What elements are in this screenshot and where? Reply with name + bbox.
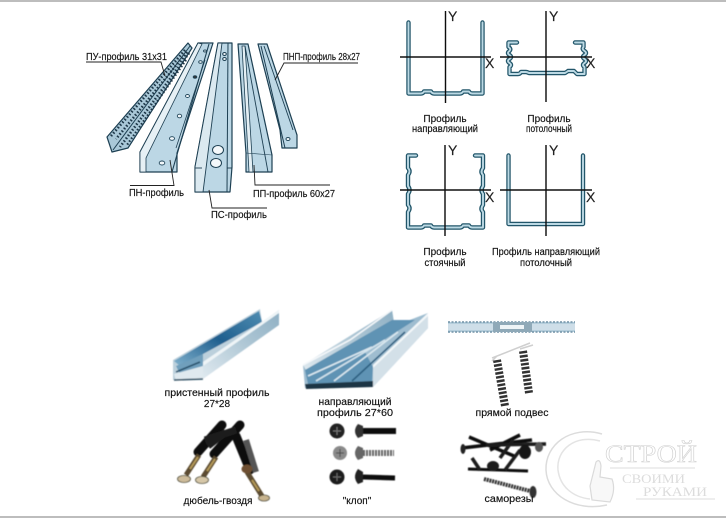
photo: дюбель-гвоздя — [178, 425, 270, 507]
caption: дюбель-гвоздя — [184, 495, 252, 507]
watermark: Строй своими руками: РУКАМИ — [643, 484, 707, 499]
section: профиль направляющий потолочный: Y — [549, 142, 559, 158]
section: профиль стоячный: X — [485, 189, 495, 205]
section: профиль потолочный: потолочный — [526, 124, 572, 135]
caption: прямой подвес — [476, 408, 548, 419]
profile: ПС — [195, 43, 232, 192]
watermark: Строй своими руками: СВОИМИ — [622, 471, 685, 486]
section: профиль направляющий: Профиль — [423, 113, 467, 125]
watermark: Строй своими руками: СТРОЙ — [605, 440, 697, 468]
section: профиль стоячный: Профиль — [423, 246, 467, 258]
section: профиль потолочный — [500, 8, 596, 135]
caption: пристенный профиль — [164, 387, 270, 399]
caption: саморезы — [484, 494, 534, 505]
label: ПН-профиль — [129, 160, 184, 199]
section: профиль направляющий — [400, 8, 495, 135]
profile: ПН — [140, 43, 213, 172]
photo: пристенный профиль 27*28: 27*28 — [204, 399, 231, 410]
photo: прямой подвес — [448, 322, 575, 419]
photo: пристенный профиль 27*28 — [164, 309, 279, 410]
section: профиль направляющий: Y — [448, 8, 458, 24]
photo: клоп screws — [330, 424, 396, 507]
section: профиль направляющий: X — [485, 55, 495, 71]
section: профиль направляющий потолочный: потолочный — [520, 258, 572, 269]
section: профиль потолочный: Профиль — [527, 113, 571, 125]
section: профиль потолочный: X — [586, 55, 596, 71]
section: профиль стоячный — [400, 142, 495, 269]
label: ПНП-профиль — [275, 51, 360, 80]
section: профиль направляющий: направляющий — [412, 124, 478, 135]
label: ПП-профиль — [253, 165, 335, 200]
watermark: Строй своими руками — [546, 432, 715, 507]
label: ПН-профиль: ПН-профиль — [129, 187, 184, 199]
section: профиль стоячный: стоячный — [424, 258, 466, 269]
profile: ПП — [238, 44, 272, 172]
label: ПС-профиль: ПС-профиль — [211, 209, 267, 221]
caption: направляющий — [318, 397, 392, 408]
caption: "клоп" — [343, 496, 372, 507]
section: профиль потолочный: Y — [549, 8, 559, 24]
label: ПС-профиль — [209, 190, 267, 221]
panel: cross sections — [400, 8, 600, 269]
photo: направляющий профиль 27*60 — [303, 310, 428, 419]
panel: profile types drawing — [86, 43, 360, 221]
section: профиль направляющий потолочный: X — [586, 189, 596, 205]
label: ПНП-профиль: ПНП-профиль 28x27 — [283, 51, 360, 63]
label: ПП-профиль: ПП-профиль 60x27 — [253, 188, 335, 200]
label: ПУ-профиль — [86, 51, 167, 76]
profile: ПНП — [258, 44, 297, 148]
photo: направляющий профиль 27*60: профиль 27*60 — [317, 407, 393, 419]
icon: thumb — [590, 461, 614, 502]
label: ПУ-профиль: ПУ-профиль 31x31 — [86, 51, 167, 63]
profile: ПУ angle — [107, 43, 192, 152]
section: профиль стоячный: Y — [448, 142, 458, 158]
section: профиль направляющий потолочный — [492, 142, 600, 269]
section: профиль направляющий потолочный: Профиль направляющий — [492, 246, 600, 258]
photo: саморезы — [460, 435, 546, 505]
